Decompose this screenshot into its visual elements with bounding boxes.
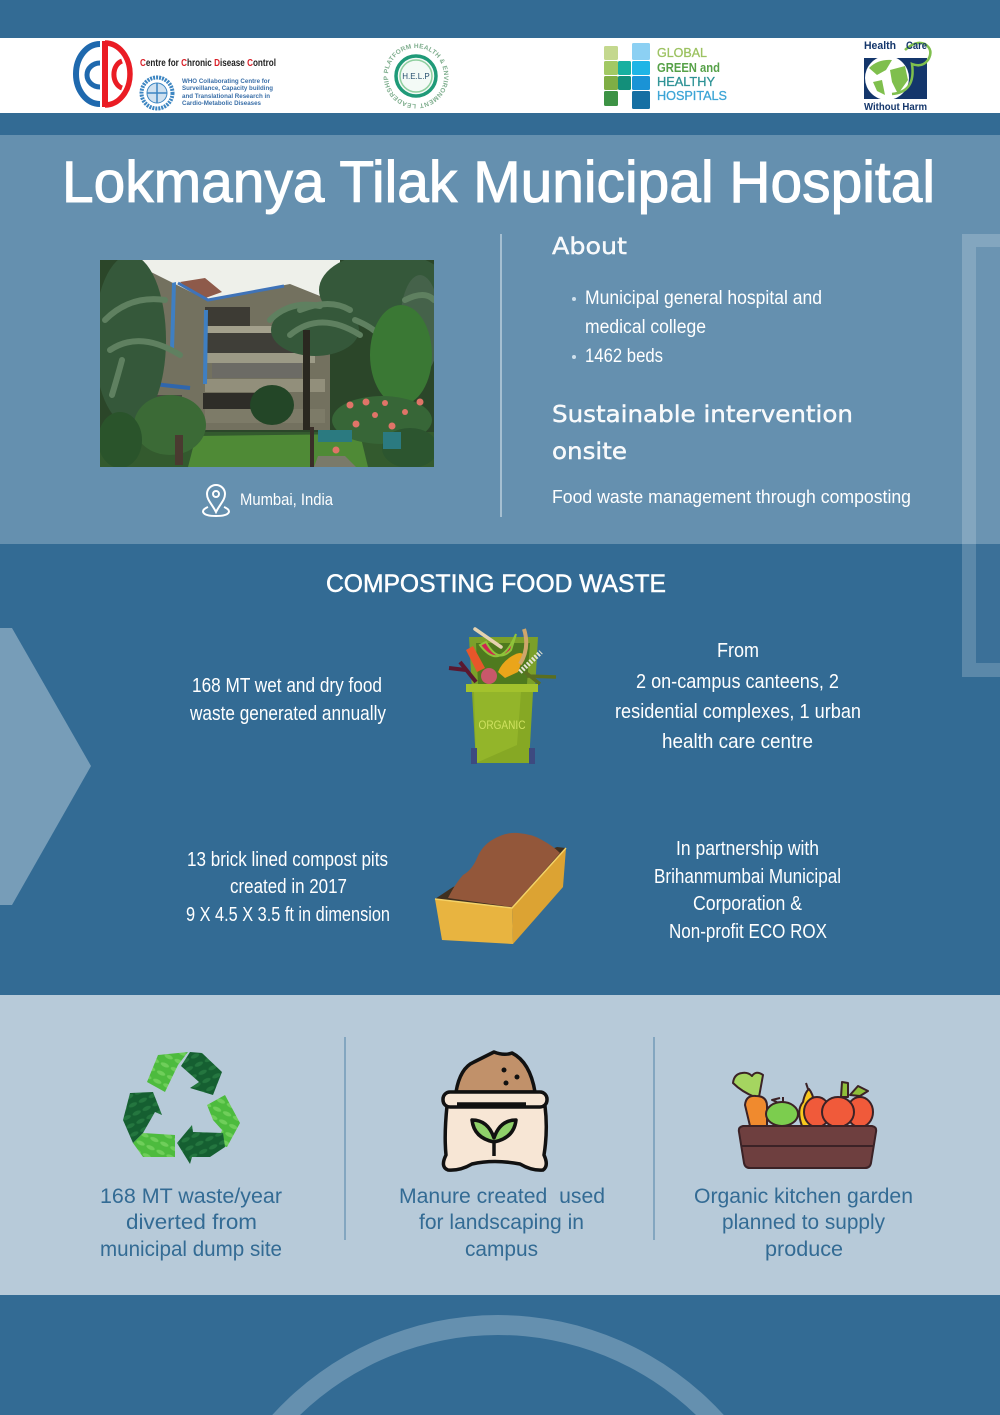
logo: Centre for Chronic Disease Control: WHO Collaborating Centre for: [182, 79, 271, 85]
logo: Health Care Without Harm: Health: [864, 40, 896, 52]
text: kitchen garden: [694, 1185, 913, 1261]
icon: manure sack: [443, 1052, 547, 1170]
icon: organic bin with food waste: ORGANIC: [478, 718, 526, 732]
logo: Centre for Chronic Disease Control: Centre for Chronic Disease Control: [140, 58, 276, 69]
icon: vegetable crate: [733, 1073, 876, 1168]
text: sources: [615, 640, 861, 753]
text: manure use: Manure created used: [399, 1185, 605, 1208]
text: partnership: Non-profit ECO ROX: [669, 921, 827, 943]
logo: HELP platform: H.E.L.P: [402, 72, 430, 81]
logo: Health Care Without Harm: Without Harm: [864, 101, 927, 113]
text: manure use: for landscaping in: [419, 1211, 584, 1234]
text: partnership: Corporation &: [693, 893, 803, 915]
text block: about: About: [552, 234, 627, 260]
text block: about: 1462 beds: [585, 346, 663, 367]
text block: sustainable intervention: [552, 402, 911, 507]
text: sources: health care centre: [662, 731, 813, 753]
text: kitchen garden: Organic kitchen garden: [694, 1185, 913, 1208]
title: Lokmanya Tilak Municipal Hospital: [62, 150, 935, 215]
text block: sustainable intervention: onsite: [552, 439, 627, 465]
text: compost pits: created in 2017: [230, 876, 347, 898]
text: sources: From: [717, 640, 759, 662]
logo: Global Green and Healthy Hospitals: GREEN and: [657, 60, 720, 75]
text: waste diverted: diverted from: [126, 1211, 257, 1234]
logo: Centre for Chronic Disease Control: Surveillance, Capacity building: [182, 86, 273, 92]
text: waste diverted: municipal dump site: [100, 1238, 282, 1261]
text: sources: residential complexes, 1 urban: [615, 701, 861, 723]
text: partnership: [654, 838, 841, 943]
text block: about: medical college: [585, 317, 706, 338]
logo: Health Care Without Harm: Care: [906, 40, 927, 52]
heading: composting food waste: COMPOSTING FOOD WASTE: [326, 570, 666, 598]
text: waste generated: 168 MT wet and dry food: [192, 675, 382, 697]
text: waste diverted: 168 MT waste/year: [100, 1185, 282, 1208]
location: Mumbai, India: Mumbai, India: [240, 490, 333, 509]
text: compost pits: 13 brick lined compost pits: [187, 849, 388, 871]
panel: hospital overview: [0, 135, 1000, 544]
decorative frame: [962, 234, 1000, 677]
text block: about: Municipal general hospital and: [585, 288, 822, 309]
text: partnership: Brihanmumbai Municipal: [654, 866, 841, 888]
decorative arc: [272, 1315, 724, 1415]
text block: about: [552, 234, 822, 367]
text: compost pits: [186, 849, 390, 926]
logo: Centre for Chronic Disease Control: and Translational Research in: [182, 94, 270, 100]
text block: sustainable intervention: Sustainable intervention: [552, 402, 853, 428]
text: waste diverted: [100, 1185, 282, 1261]
logo: Global Green and Healthy Hospitals: HOSPITALS: [657, 88, 727, 103]
logo: Global Green and Healthy Hospitals: GLOBAL: [657, 45, 707, 60]
text: kitchen garden: planned to supply: [722, 1211, 885, 1234]
icon: organic bin with food waste: [449, 629, 556, 764]
logo: Global Green and Healthy Hospitals: HEALTHY: [657, 74, 715, 89]
panel: outcomes: [0, 995, 1000, 1295]
logo: Centre for Chronic Disease Control: [76, 41, 276, 108]
divider: [500, 234, 502, 517]
icon: map pin: [203, 485, 229, 516]
text: partnership: In partnership with: [676, 838, 819, 860]
icon: compost pit: [435, 833, 566, 944]
logo: Centre for Chronic Disease Control: Cardio-Metabolic Diseases: [182, 101, 262, 107]
logo: Global Green and Healthy Hospitals: [604, 43, 727, 109]
location: Mumbai, India: [203, 485, 333, 516]
text: compost pits: 9 X 4.5 X 3.5 ft in dimension: [186, 904, 390, 926]
panel: logo strip: [0, 38, 1000, 113]
text: manure use: campus: [465, 1238, 538, 1261]
decorative arrow: [0, 628, 91, 905]
logo: HELP platform: LEADERSHIP PLATFORM HEALTH & ENVIRONMENT: [384, 44, 449, 108]
hospital photo: [100, 260, 434, 467]
text block: sustainable intervention: Food waste management through composting: [552, 486, 911, 507]
text: manure use: [399, 1185, 605, 1261]
text: waste generated: [189, 675, 386, 725]
text: waste generated: waste generated annually: [189, 703, 386, 725]
icon: recycling leaves: [123, 1052, 240, 1164]
text: sources: 2 on-campus canteens, 2: [636, 671, 839, 693]
text: kitchen garden: produce: [765, 1238, 843, 1261]
logo: Health Care Without Harm: [864, 40, 930, 113]
